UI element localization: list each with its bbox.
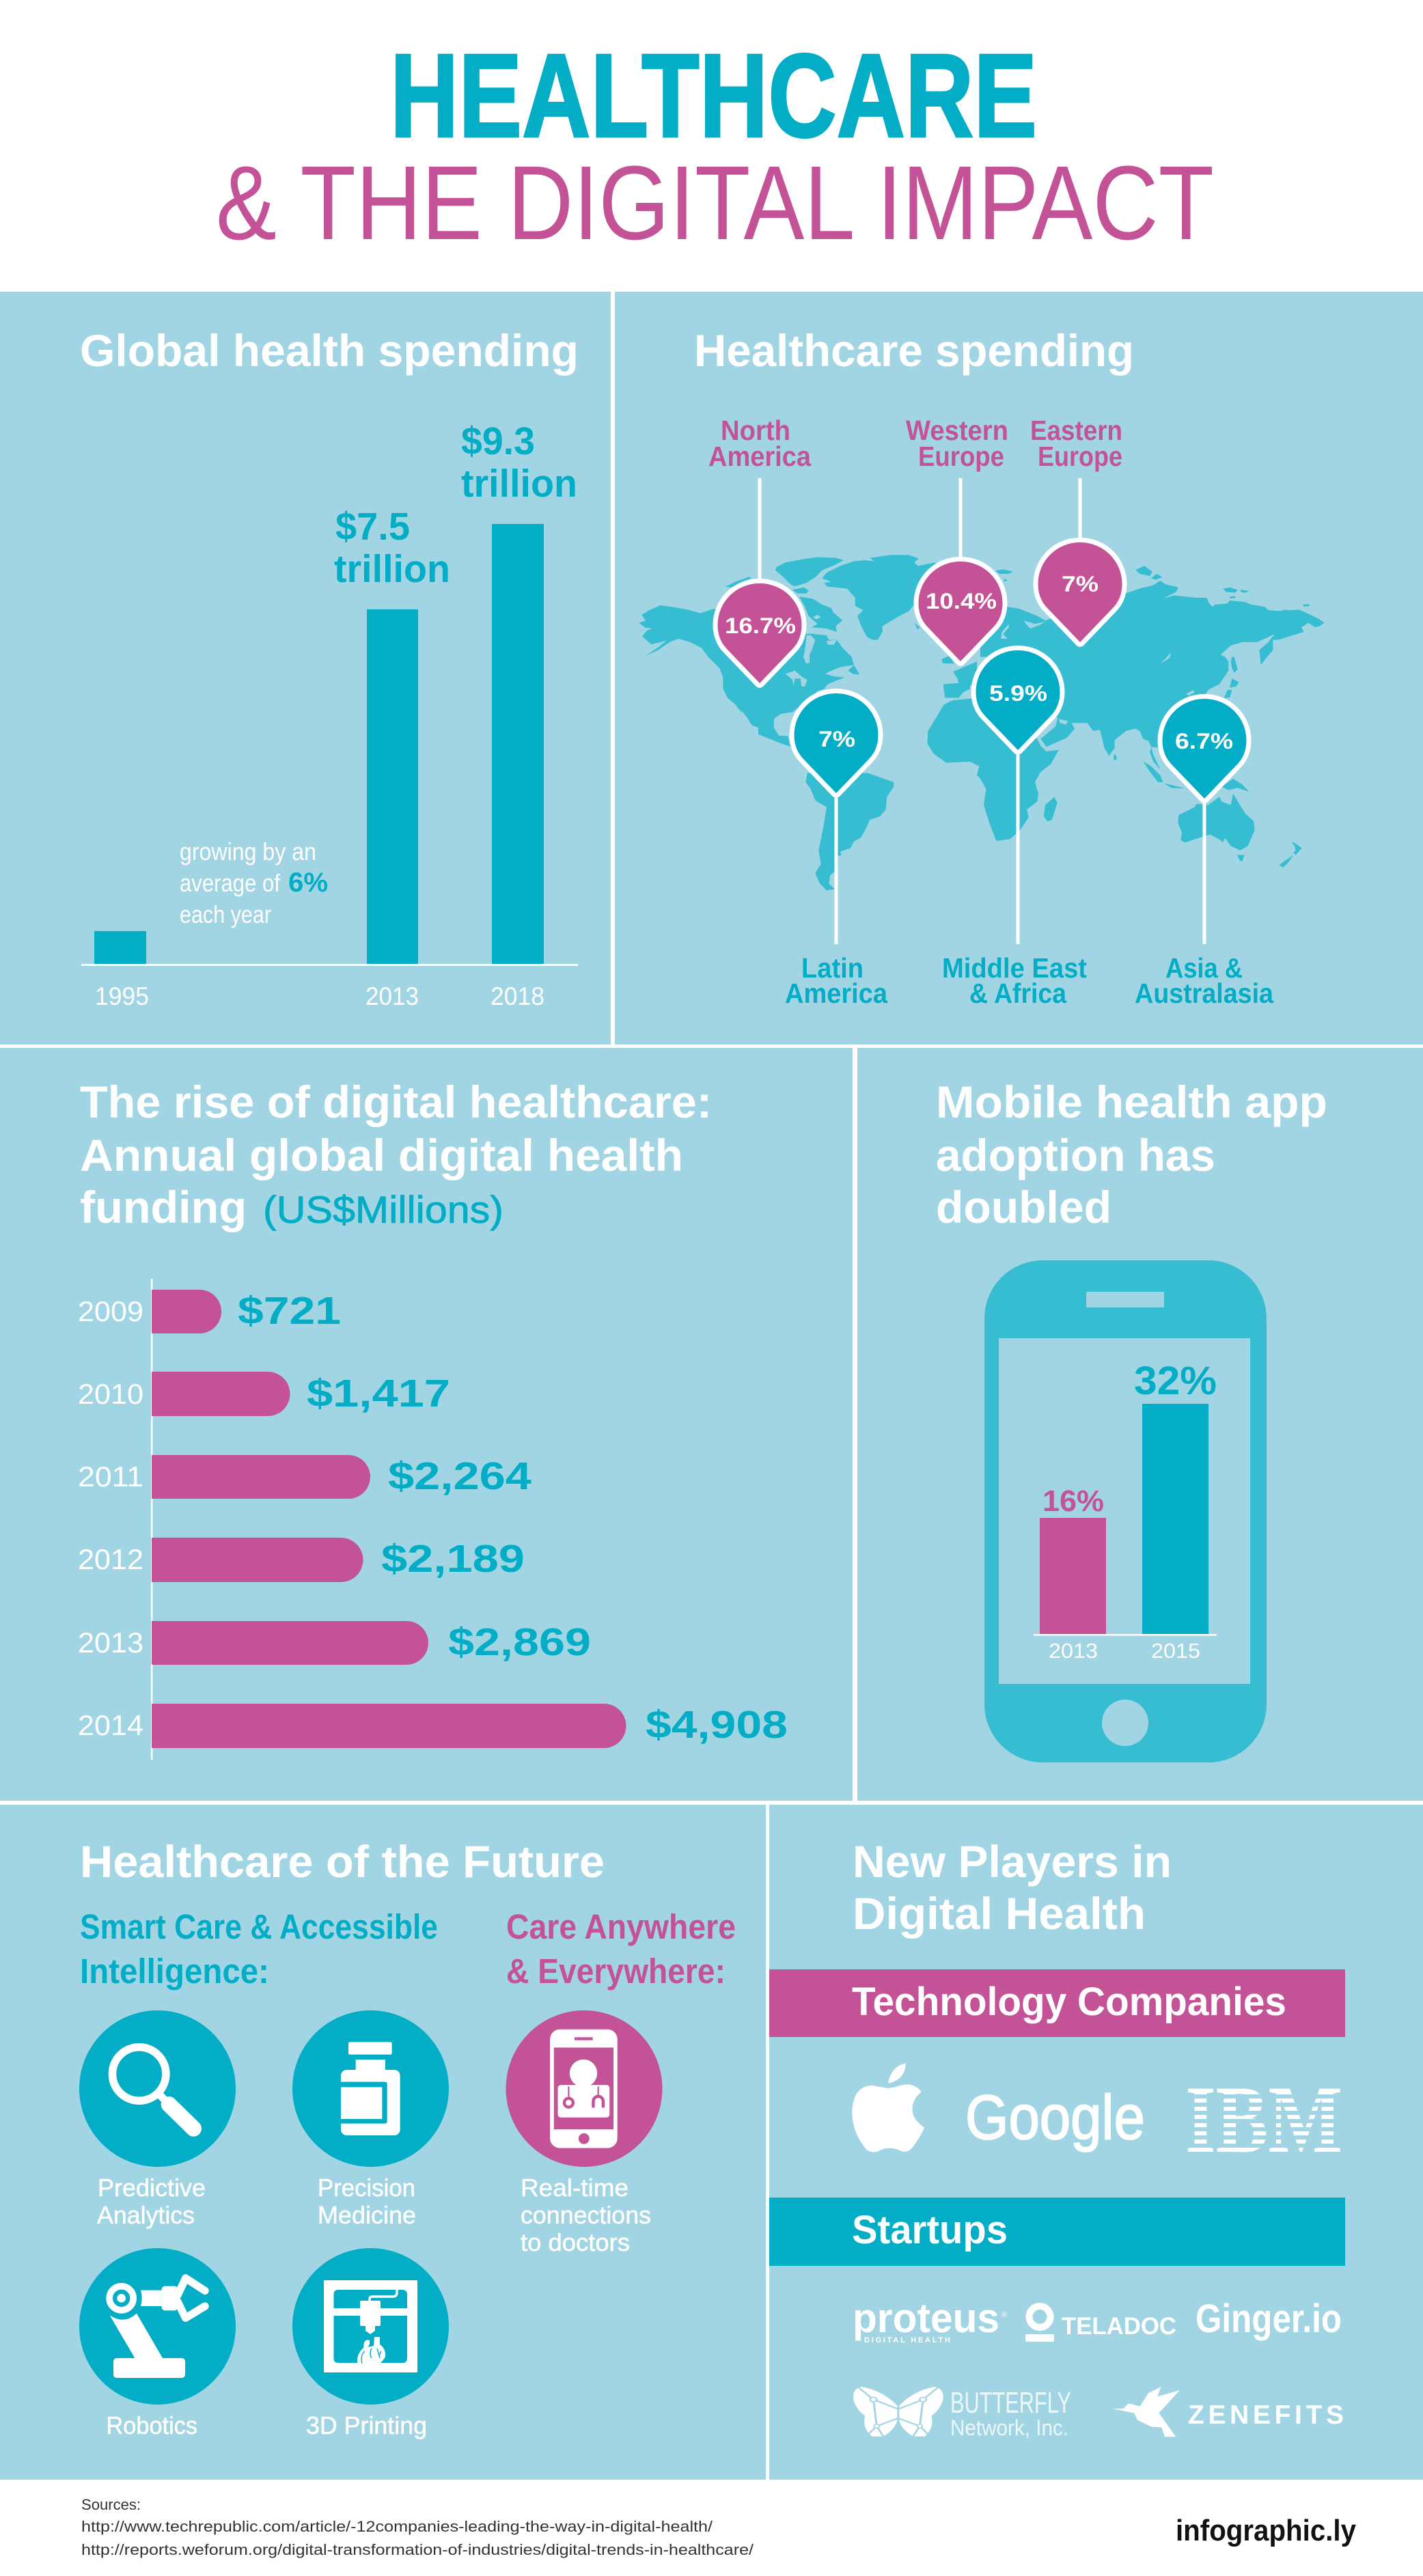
bar chart: annual funding: $1,417 [307,1372,450,1415]
icon: precision medicine bottle: Medicine [318,2201,416,2229]
bar chart: spending by year [81,419,578,1010]
heading: rise of digital healthcare: The rise of digital healthcare: [80,1077,712,1127]
pin: Western Europe: Western [906,415,1008,446]
heading: mobile health app adoption: Mobile health app [936,1077,1327,1127]
icon: predictive analytics magnifier [79,2010,236,2229]
panel: global health spending [0,292,611,1044]
phone with bar chart: 16% [1042,1484,1104,1518]
bar chart: annual funding: 2012 [78,1543,143,1575]
banner: technology companies [769,1969,1345,2037]
pin: Asia and Australasia [1135,697,1274,1009]
growth note: 6% [288,868,328,898]
subheading: care anywhere [506,1907,736,1991]
subheading: care anywhere: & Everywhere: [506,1952,726,1991]
pin: Asia and Australasia: Australasia [1135,978,1274,1009]
logo: Teladoc [1025,2306,1176,2342]
heading: rise of digital healthcare: Annual global digital health [80,1130,683,1180]
subheading: smart care: Smart Care & Accessible [80,1907,438,1946]
pin: Western Europe: Europe [918,441,1004,472]
bar chart: spending by year: 1995 [95,982,149,1010]
pin: North America: North [721,415,790,446]
pin: North America [708,415,812,686]
phone with bar chart: 2015 [1151,1639,1200,1663]
pin: Latin America: Latin [801,952,864,984]
pin: Eastern Europe: 7% [1062,572,1099,596]
phone with bar chart [984,1260,1267,1762]
pin: Middle East and Africa: Middle East [942,952,1087,984]
pin: North America: America [708,441,812,472]
growth note [180,837,328,928]
bar chart: spending by year: 2013 [365,982,419,1010]
logo: Butterfly Network: Network, Inc. [950,2415,1068,2440]
panel: rise of digital healthcare [0,1048,853,1801]
brand: infographic.ly: infographic.ly [1176,2514,1356,2547]
banner: startups: Startups [852,2208,1008,2252]
sources: http://reports.weforum.org/digital-transformation-of-industries/digital-trends-in-healthcare/ [81,2541,754,2558]
heading: new players: Digital Health [853,1888,1146,1939]
heading: new players: New Players in [853,1836,1172,1887]
heading: rise of digital healthcare [80,1077,712,1232]
subheading: care anywhere: Care Anywhere [506,1907,736,1946]
bar chart: annual funding: $2,189 [381,1537,525,1581]
logo: IBM: IBM [1185,2066,1342,2173]
bar chart: spending by year: 2018 [491,982,544,1010]
logo: Google: Google [965,2083,1145,2152]
panel: healthcare of the future [0,1805,766,2480]
bar chart: spending by year: $7.5 [335,505,410,549]
pin: Middle East and Africa [942,648,1087,1009]
sources [81,2496,754,2558]
pin: Middle East and Africa: & Africa [969,978,1067,1009]
banner: technology companies: Technology Companies [852,1980,1286,2024]
logo: proteus: DIGITAL HEALTH [864,2336,950,2344]
icon: precision medicine bottle: Precision [318,2174,415,2202]
logo: Butterfly Network: BUTTERFLY [950,2386,1071,2420]
title [216,29,1214,262]
pin: Western Europe: 10.4% [926,589,997,613]
icon: real-time connections phone: Real-time [521,2174,628,2202]
pin: Eastern Europe: Europe [1038,441,1122,472]
icon: predictive analytics magnifier: Predictive [98,2174,206,2202]
pin: Latin America: America [785,978,888,1009]
heading: rise of digital healthcare: (US$Millions) [263,1188,503,1231]
heading: rise of digital healthcare: funding [80,1182,247,1232]
bar chart: annual funding: 2009 [78,1295,143,1327]
logo: Teladoc: TELADOC [1062,2313,1176,2340]
bar chart: annual funding: $2,869 [448,1620,591,1664]
bar chart: annual funding: $2,264 [388,1454,531,1498]
bar chart: spending by year: $9.3 [461,419,535,463]
growth note: each year [180,900,271,928]
growth note: growing by an [180,837,316,865]
icon: real-time connections phone: connections [521,2201,651,2229]
bar chart: spending by year: trillion [461,462,577,505]
panel: healthcare spending map [615,292,1423,1044]
icon: precision medicine bottle [292,2010,449,2229]
logo: Zenefits [1113,2387,1344,2437]
heading: mobile health app adoption: doubled [936,1182,1111,1232]
icon: real-time connections phone: to doctors [521,2228,630,2256]
bar chart: annual funding: 2011 [78,1460,143,1493]
pin: Asia and Australasia: 6.7% [1175,729,1233,753]
bar chart: annual funding: $721 [238,1289,341,1333]
logo: proteus: proteus [853,2295,999,2341]
pin: Latin America: 7% [818,727,855,751]
phone with bar chart: 32% [1134,1359,1217,1403]
icon: 3D printing: 3D Printing [306,2411,427,2439]
growth note: average of [180,869,281,897]
logo: Ginger.io: Ginger.io [1196,2297,1342,2341]
pin: Latin America [785,691,888,1009]
heading: new players [853,1836,1172,1939]
bar chart: spending by year: trillion [334,547,450,591]
logo: Zenefits: ZENEFITS [1188,2400,1344,2430]
heading: mobile health app adoption [936,1077,1327,1232]
bar chart: annual funding: 2013 [78,1626,143,1659]
sources: Sources: [81,2496,141,2513]
icon: real-time connections phone [506,2010,663,2256]
subheading: smart care: Intelligence: [80,1952,269,1991]
icon: robotics arm [79,2248,236,2439]
pin: North America: 16.7% [725,613,796,638]
title: & THE DIGITAL IMPACT [216,144,1214,262]
pin: Eastern Europe [1030,415,1124,645]
pin: Middle East and Africa: 5.9% [989,681,1047,706]
heading: healthcare spending: Healthcare spending [694,325,1134,376]
bar chart: annual funding: 2010 [78,1378,143,1410]
heading: global health spending: Global health spending [80,325,579,376]
pin: Western Europe [906,415,1008,664]
panel: new players in digital health [769,1805,1423,2480]
logo: Butterfly Network [853,2386,1071,2440]
icon: 3D printing [292,2248,449,2439]
pin: Asia and Australasia: Asia & [1165,952,1243,984]
heading: healthcare of the future: Healthcare of the Future [80,1836,605,1887]
banner: startups [769,2198,1345,2266]
sources: http://www.techrepublic.com/article/-12companies-leading-the-way-in-digital-health/ [81,2518,713,2535]
heading: mobile health app adoption: adoption has [936,1130,1215,1180]
title: HEALTHCARE [390,29,1037,162]
world map [639,555,1324,890]
panel: mobile health app adoption [857,1048,1423,1801]
bar chart: annual funding [78,1279,788,1760]
bar chart: annual funding: $4,908 [646,1703,788,1747]
icon: predictive analytics magnifier: Analytics [97,2201,195,2229]
logo: Apple [852,2063,924,2152]
bar chart: annual funding: 2014 [78,1709,143,1741]
logo: proteus: ® [1001,2311,1007,2319]
pin: Eastern Europe: Eastern [1030,415,1122,446]
icon: robotics arm: Robotics [107,2411,197,2439]
subheading: smart care [80,1907,438,1991]
phone with bar chart: 2013 [1049,1639,1098,1663]
